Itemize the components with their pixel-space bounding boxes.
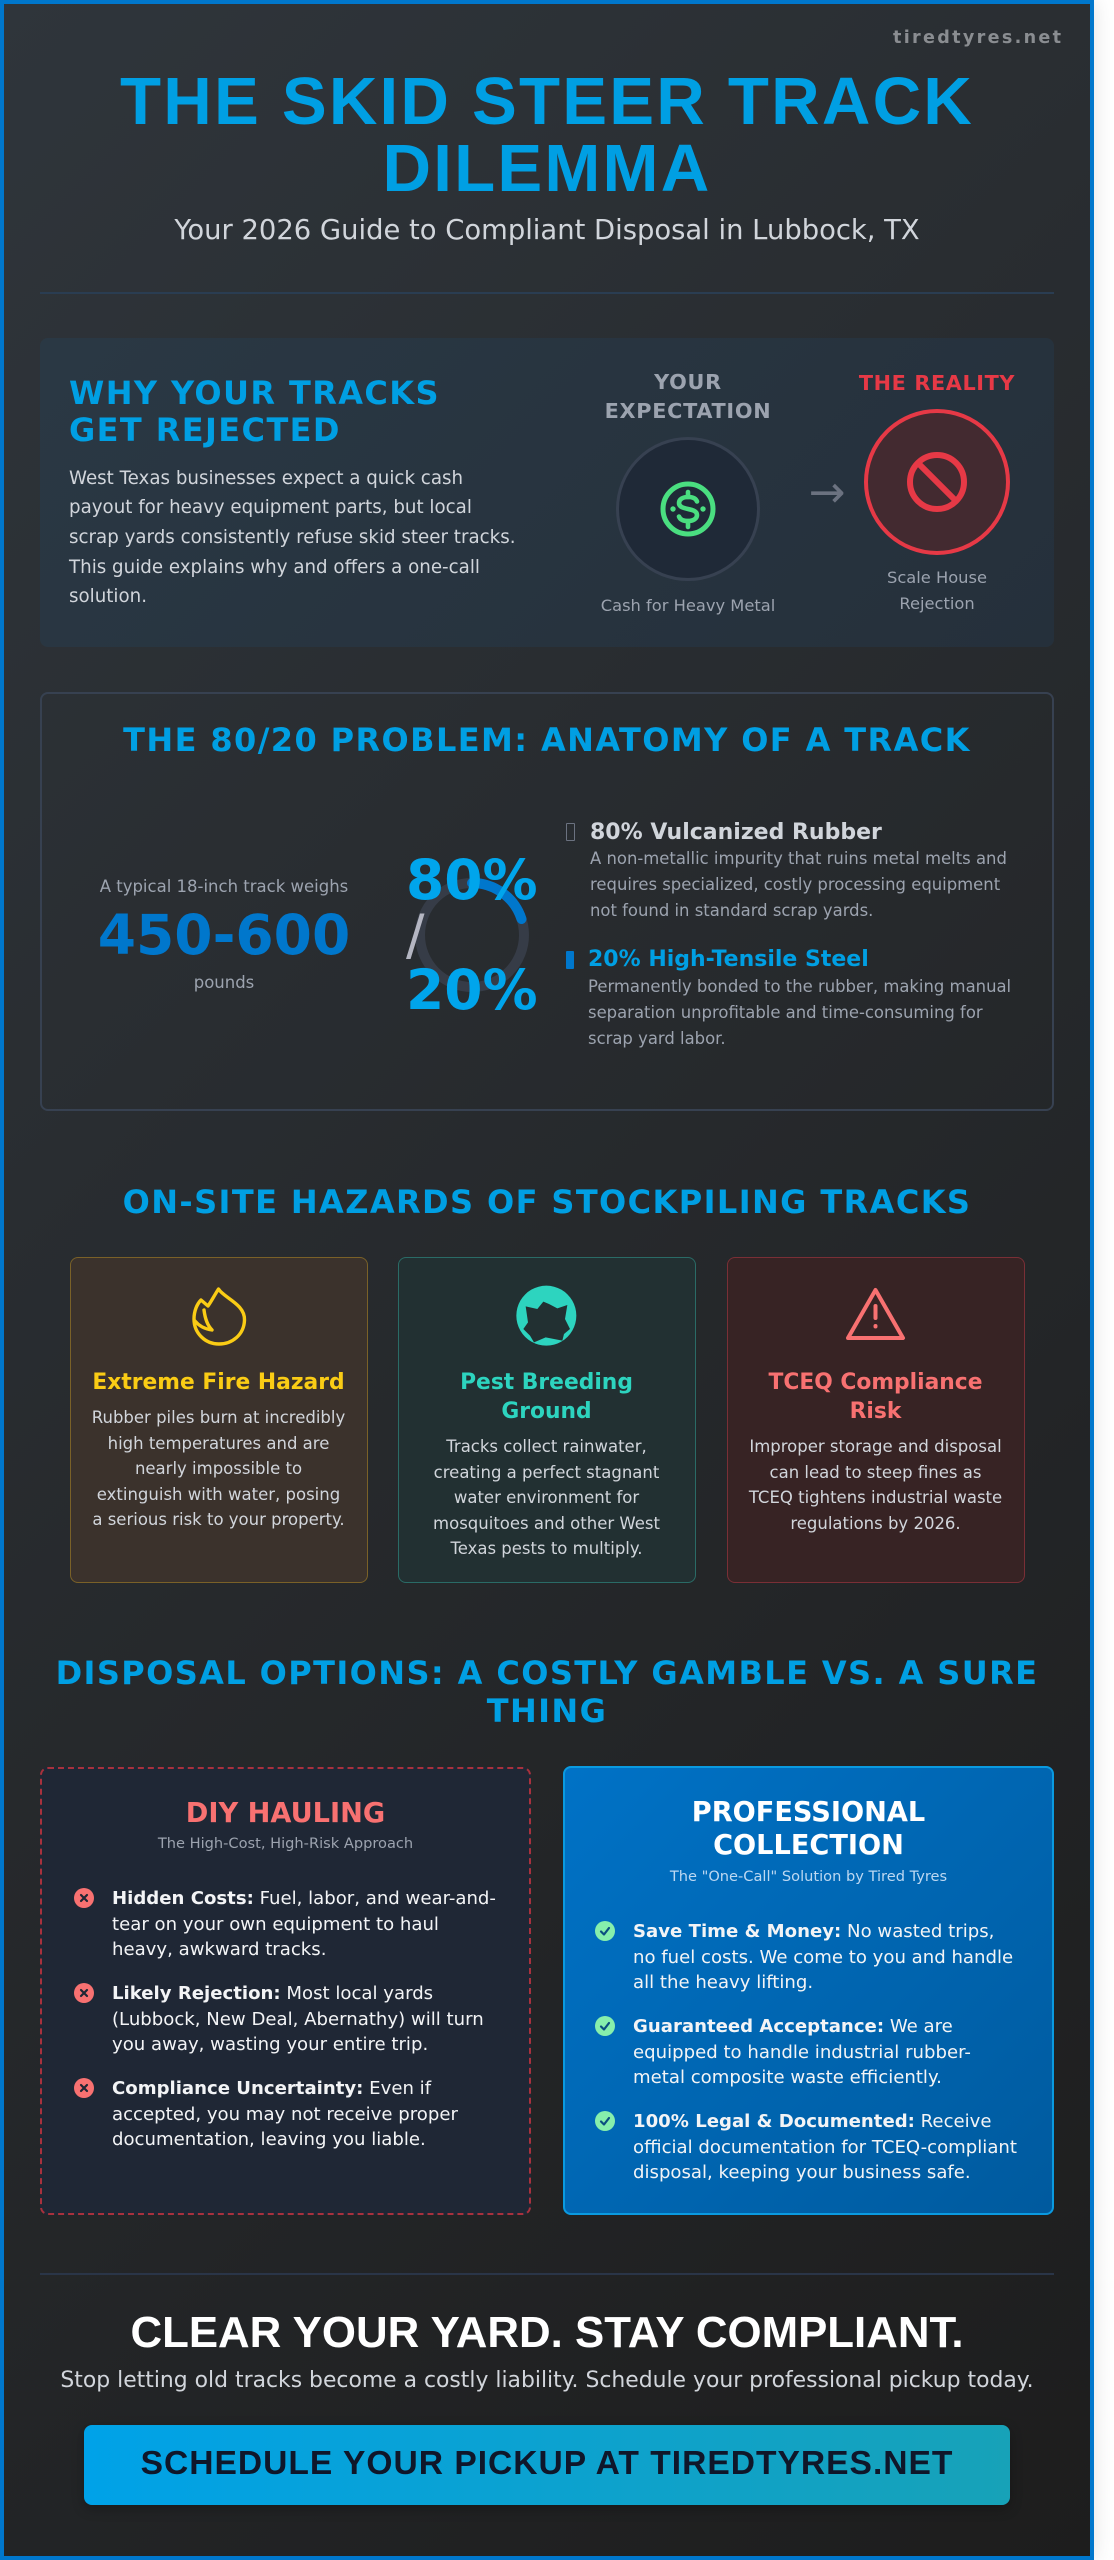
card: TCEQ compliance — [727, 1257, 1025, 1583]
subtitle: DIY hauling: The High-Cost, High-Risk Approach — [158, 1835, 413, 1852]
title: pest breeding — [460, 1370, 633, 1424]
legend icon: rubber — [566, 823, 575, 841]
text: compliance uncertainty: Compliance Uncertainty: Even if — [112, 2078, 431, 2099]
text: save time: no fuel costs. We come to you and handle — [633, 1947, 1013, 1968]
text: pest breeding: Texas pests to multiply. — [450, 1539, 643, 1558]
heading: disposal options: DISPOSAL OPTIONS: A COSTLY GAMBLE VS. A SURE — [56, 1654, 1038, 1692]
text: legal and documented: 100% Legal & Documented: Receive — [633, 2111, 992, 2132]
expectation label: EXPECTATION — [605, 399, 771, 423]
text: compliance uncertainty: accepted, you may not receive proper — [112, 2104, 458, 2125]
bullet: guaranteed acceptance — [595, 2016, 971, 2088]
legend text: steel: scrap yard labor. — [588, 1029, 726, 1048]
panel: DIY hauling — [40, 1767, 531, 2215]
icon: x — [74, 1983, 94, 2003]
legend text: rubber: not found in standard scrap yards. — [590, 901, 873, 920]
weight lead-in: A typical 18-inch track weighs — [100, 877, 348, 896]
bullet: compliance uncertainty — [74, 2078, 458, 2150]
title: TCEQ compliance — [768, 1370, 983, 1424]
donut label: 20% — [406, 958, 538, 1022]
text: likely rejection: you away, wasting your entire trip. — [112, 2034, 428, 2055]
title: TCEQ compliance: Risk — [850, 1399, 901, 1424]
title — [120, 64, 974, 206]
text: save time: all the heavy lifting. — [633, 1972, 813, 1993]
intro paragraph — [68, 468, 516, 607]
text: compliance uncertainty: documentation, leaving you liable. — [112, 2129, 426, 2150]
text: save time — [633, 1921, 1013, 1993]
donut label: / — [406, 903, 425, 967]
icon: check — [595, 2111, 615, 2131]
heading: disposal options: THING — [487, 1692, 607, 1730]
title: DIY hauling: DIY HAULING — [186, 1798, 385, 1829]
text: save time: Save Time & Money: No wasted trips, — [633, 1921, 994, 1942]
expectation label: YOUR — [654, 370, 722, 394]
expectation column — [601, 370, 775, 615]
legend text: rubber: requires specialized, costly processing equipment — [590, 875, 1000, 894]
text: hidden costs: tear on your own equipment to haul — [112, 1914, 439, 1935]
legend text: steel: Permanently bonded to the rubber, making manual — [588, 977, 1011, 996]
text: fire hazard: nearly impossible to — [135, 1459, 302, 1478]
title: pest breeding: Ground — [501, 1399, 592, 1424]
text: guaranteed acceptance: Guaranteed Acceptance: We are — [633, 2016, 953, 2037]
text: hidden costs: Hidden Costs: Fuel, labor, and wear-and- — [112, 1888, 496, 1909]
text: guaranteed acceptance — [633, 2016, 971, 2088]
bullet: legal and documented — [595, 2111, 1017, 2183]
track weight stat — [98, 877, 350, 992]
legend title: steel: 20% High-Tensile Steel — [588, 946, 869, 972]
text: pest breeding: creating a perfect stagnant — [434, 1463, 659, 1482]
heading: why rejected: WHY YOUR TRACKS — [69, 374, 440, 412]
text: fire hazard: extinguish with water, posing — [97, 1485, 340, 1504]
icon: pest — [516, 1286, 576, 1346]
card: pest breeding — [398, 1257, 696, 1583]
donut chart: 80/20 — [406, 848, 538, 1022]
heading: disposal options — [56, 1654, 1038, 1730]
text: guaranteed acceptance: metal composite waste efficiently. — [633, 2067, 942, 2088]
title: professional collection: COLLECTION — [713, 1830, 904, 1861]
title: professional collection — [692, 1797, 925, 1861]
text: TCEQ compliance: can lead to steep fines as — [770, 1463, 981, 1482]
legend text: steel: separation unprofitable and time-consuming for — [588, 1003, 983, 1022]
panel: 80/20 anatomy — [40, 692, 1054, 1111]
button label: SCHEDULE YOUR PICKUP AT TIREDTYRES.NET — [141, 2445, 953, 2482]
text: fire hazard: high temperatures and are — [108, 1434, 329, 1453]
icon: x — [74, 2078, 94, 2098]
bullet: likely rejection — [74, 1983, 484, 2055]
weight number: 450-600 — [98, 903, 350, 967]
text: compliance uncertainty — [112, 2078, 458, 2150]
legend text: rubber: A non-metallic impurity that ruins metal melts and — [590, 849, 1007, 868]
text: pest breeding: water environment for — [454, 1488, 639, 1507]
expectation caption: Cash for Heavy Metal — [601, 596, 775, 615]
text: likely rejection: Likely Rejection: Most local yards — [112, 1983, 433, 2004]
text: pest breeding — [433, 1437, 660, 1558]
call to action heading: CLEAR YOUR YARD. STAY COMPLIANT. — [130, 2308, 964, 2357]
heading: hazards: ON-SITE HAZARDS OF STOCKPILING TRACKS — [123, 1183, 971, 1221]
text: legal and documented — [633, 2109, 1045, 2186]
text: likely rejection — [112, 1983, 484, 2055]
expectation label — [605, 370, 771, 423]
legend title: rubber: 80% Vulcanized Rubber — [590, 820, 882, 844]
text: legal and documented: disposal, keeping your business safe. — [633, 2162, 971, 2183]
text: legal and documented: official documentation for TCEQ-compliant — [633, 2137, 1017, 2158]
weight unit: pounds — [194, 973, 254, 992]
panel: why your tracks get rejected — [40, 338, 1054, 647]
text: hidden costs: heavy, awkward tracks. — [112, 1939, 326, 1960]
bullet: save time — [595, 1921, 1013, 1993]
title: fire hazard: Extreme Fire Hazard — [92, 1370, 345, 1395]
icon: check — [595, 1921, 615, 1941]
text: TCEQ compliance: regulations by 2026. — [790, 1514, 961, 1533]
bullet: hidden costs — [74, 1888, 496, 1960]
expectation circle with dollar icon — [616, 437, 760, 581]
subtitle: professional collection: The "One-Call" Solution by Tired Tyres — [670, 1868, 947, 1885]
legend text: steel — [588, 977, 1011, 1048]
legend — [566, 820, 1011, 1048]
text: TCEQ compliance: TCEQ tightens industrial waste — [749, 1488, 1002, 1507]
legend icon: steel — [566, 951, 574, 969]
title: THE SKID STEER TRACK — [120, 64, 974, 139]
text: hidden costs — [112, 1888, 496, 1960]
icon: x — [74, 1888, 94, 1908]
icon: check — [595, 2016, 615, 2036]
heading: why rejected — [69, 374, 440, 449]
title: pest breeding: Pest Breeding — [460, 1370, 633, 1395]
brand url: tiredtyres.net — [893, 28, 1063, 48]
intro paragraph: West Texas businesses expect a quick cash — [69, 468, 463, 488]
call to action button — [84, 2425, 1010, 2505]
donut label — [406, 848, 538, 1022]
reality caption: Rejection — [899, 594, 975, 613]
text: pest breeding: Tracks collect rainwater, — [446, 1437, 647, 1456]
card: fire hazard — [70, 1257, 368, 1583]
text: TCEQ compliance — [748, 1437, 1002, 1533]
icon: warning triangle — [846, 1288, 906, 1340]
reality label: THE REALITY — [859, 371, 1015, 395]
reality caption — [887, 568, 987, 613]
heading: why rejected: GET REJECTED — [69, 411, 341, 449]
legend text: rubber — [590, 849, 1007, 920]
reality circle with ban icon — [864, 409, 1010, 555]
subtitle: Your 2026 Guide to Compliant Disposal in Lubbock, TX — [174, 215, 920, 246]
text: fire hazard: Rubber piles burn at incredibly — [92, 1408, 345, 1427]
intro paragraph: This guide explains why and offers a one-call — [69, 557, 480, 578]
intro paragraph: scrap yards consistently refuse skid steer tracks. — [69, 527, 516, 548]
intro paragraph: payout for heavy equipment parts, but local — [69, 497, 472, 518]
donut label: 80% — [406, 848, 538, 912]
intro paragraph: solution. — [69, 586, 147, 607]
text: pest breeding: mosquitoes and other West — [433, 1514, 660, 1533]
title: professional collection: PROFESSIONAL — [692, 1797, 925, 1828]
reality column — [858, 371, 1015, 613]
icon: flame — [192, 1287, 246, 1346]
title: TCEQ compliance: TCEQ Compliance — [768, 1370, 983, 1395]
text: fire hazard: a serious risk to your property. — [92, 1510, 345, 1529]
text: fire hazard — [92, 1408, 345, 1529]
title: DILEMMA — [383, 130, 711, 206]
text: likely rejection: (Lubbock, New Deal, Abernathy) will turn — [112, 2009, 484, 2030]
panel: professional collection — [563, 1766, 1054, 2215]
call to action text: Stop letting old tracks become a costly liability. Schedule your professional pickup today. — [60, 2368, 1034, 2393]
heading: 80/20 problem: THE 80/20 PROBLEM: ANATOMY OF A TRACK — [123, 721, 971, 759]
reality caption: Scale House — [887, 568, 987, 587]
arrow: expectation to reality: → — [809, 467, 845, 518]
text: guaranteed acceptance: equipped to handle industrial rubber- — [633, 2042, 971, 2063]
text: TCEQ compliance: Improper storage and disposal — [749, 1437, 1002, 1456]
